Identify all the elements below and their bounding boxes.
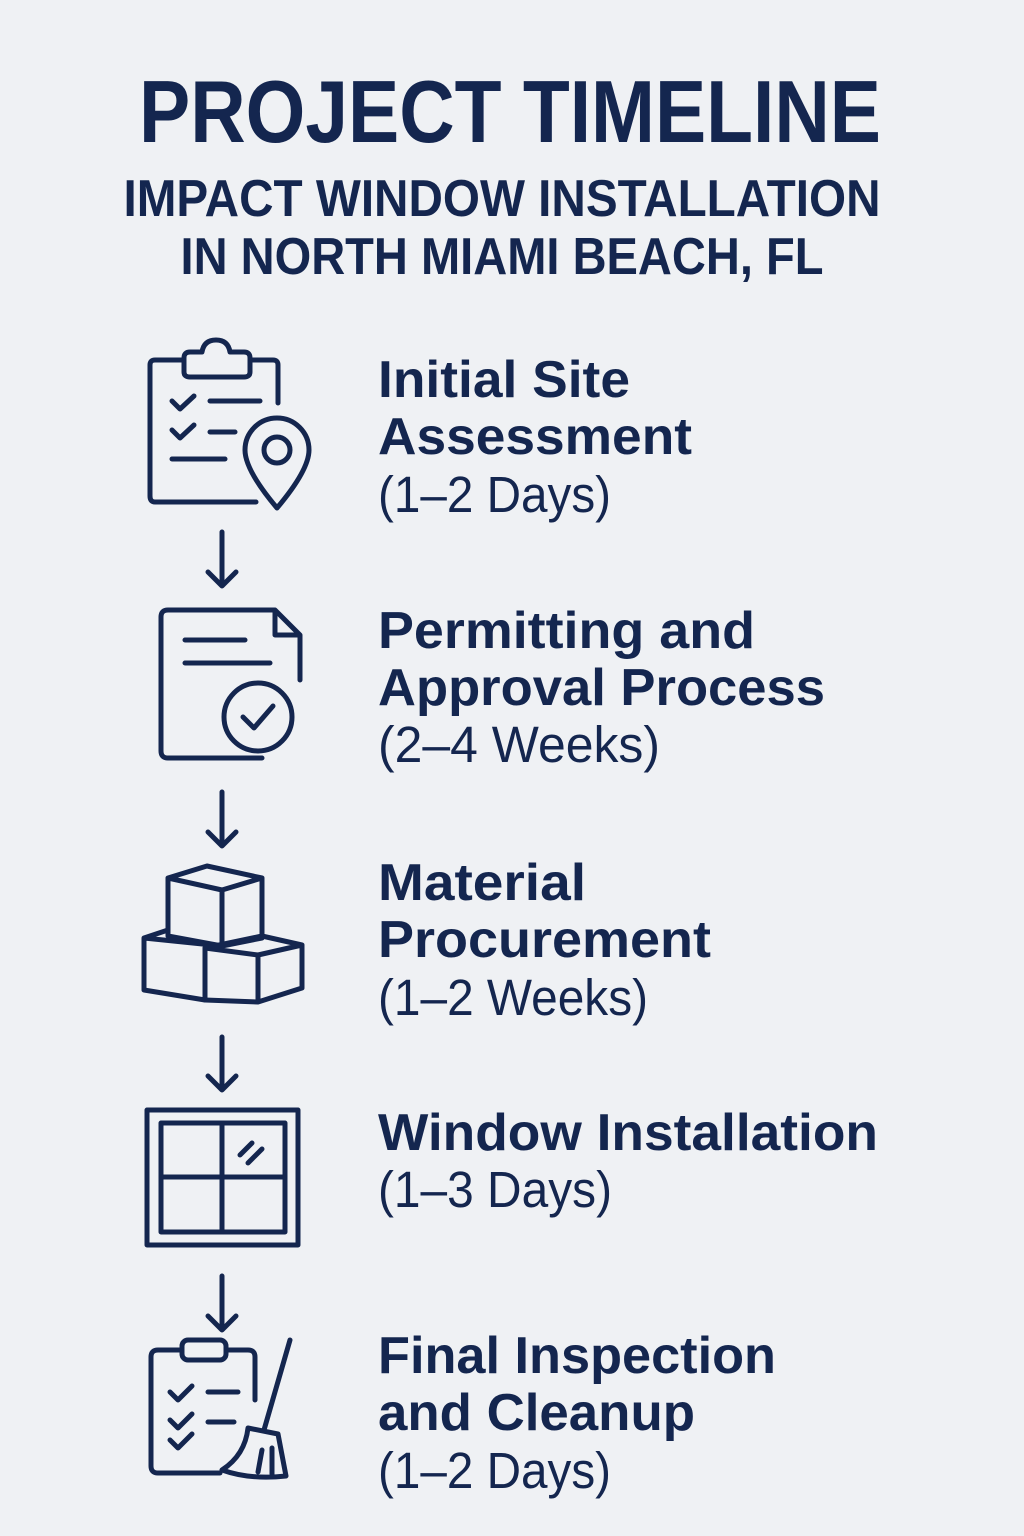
step 2 text: Permitting and bbox=[378, 602, 755, 660]
arrow 2 bbox=[208, 792, 236, 846]
subtitle bbox=[124, 170, 880, 286]
title: PROJECT TIMELINE bbox=[139, 62, 881, 161]
step 2 text bbox=[378, 602, 825, 773]
arrow 1 bbox=[208, 532, 236, 586]
step 4 text: (1–3 Days) bbox=[378, 1161, 612, 1218]
icon: document with check bbox=[161, 610, 300, 758]
step 3 text: Procurement bbox=[378, 911, 711, 969]
subtitle: IMPACT WINDOW INSTALLATION bbox=[124, 170, 880, 228]
arrow 4 bbox=[208, 1276, 236, 1330]
step 4 text: Window Installation bbox=[378, 1104, 878, 1162]
step 5 text: and Cleanup bbox=[378, 1384, 695, 1442]
icon: clipboard with location pin bbox=[150, 340, 309, 508]
step 5 text: Final Inspection bbox=[378, 1327, 776, 1385]
icon: boxes bbox=[144, 866, 302, 1002]
icon: window bbox=[147, 1110, 298, 1245]
step 3 text bbox=[378, 854, 711, 1026]
step 5 text: (1–2 Days) bbox=[378, 1442, 611, 1499]
icon: clipboard with broom bbox=[151, 1340, 290, 1477]
step 2 text: Approval Process bbox=[378, 659, 825, 717]
step 5 text bbox=[378, 1327, 776, 1499]
step 1 text: Initial Site bbox=[378, 351, 630, 409]
step 4 text bbox=[378, 1104, 878, 1218]
step 1 text: (1–2 Days) bbox=[378, 466, 611, 523]
arrow 3 bbox=[208, 1037, 236, 1090]
step 2 text: (2–4 Weeks) bbox=[378, 716, 660, 773]
step 3 text: (1–2 Weeks) bbox=[378, 969, 648, 1026]
step 3 text: Material bbox=[378, 854, 586, 912]
step 1 text bbox=[378, 351, 692, 523]
step 1 text: Assessment bbox=[378, 408, 692, 466]
subtitle: IN NORTH MIAMI BEACH, FL bbox=[180, 228, 824, 286]
